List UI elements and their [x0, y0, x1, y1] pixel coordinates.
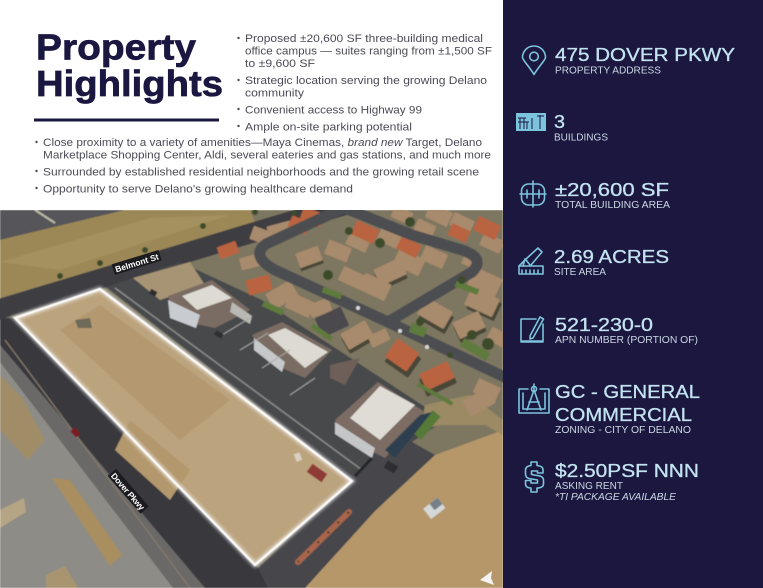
highlights list: right column: office campus — suites ranging from ±1,500 SF [245, 46, 492, 58]
highlights list: full-width rows: Marketplace Shopping Center, Aldi, several eateries and gas stations, and much more [43, 150, 491, 162]
stat: buildings [516, 112, 608, 144]
north arrow [480, 571, 494, 585]
title rule [34, 118, 219, 122]
street label: Belmont St: Belmont St [114, 252, 160, 274]
houses [239, 203, 512, 417]
lawns and trees [262, 281, 490, 440]
icon: dollar sign [526, 462, 544, 492]
highlights list: full-width rows: Surrounded by established residential neighborhoods and the growing retail scene [43, 166, 479, 178]
icon: compass and blueprint [519, 384, 549, 413]
parking lot top left [0, 210, 125, 240]
stat: address: PROPERTY ADDRESS [555, 66, 661, 76]
stat: asking rent [526, 461, 699, 503]
title [36, 26, 223, 104]
highlights list: right column: Ample on-site parking potential [245, 122, 412, 134]
highlights list: right column: Proposed ±20,600 SF three-building medical [245, 33, 483, 45]
red shed [307, 464, 327, 482]
lower right field [305, 430, 503, 588]
stat: site area: SITE AREA [554, 267, 606, 278]
parcel outline [15, 289, 352, 565]
stat: APN [521, 315, 698, 346]
residential ground [0, 210, 503, 588]
stat: buildings: 3 [554, 112, 565, 132]
highlights list: right column: community [245, 88, 305, 100]
stat: buildings: BUILDINGS [554, 133, 608, 144]
development strip [106, 262, 445, 480]
icon: pencil on notepad [521, 317, 544, 342]
stat: zoning: ZONING - CITY OF DELANO [555, 425, 691, 436]
stat: zoning: GC - GENERAL [555, 382, 700, 402]
stat: asking rent: ASKING RENT [555, 481, 623, 492]
stat: asking rent: *TI PACKAGE AVAILABLE [555, 492, 676, 503]
stat: address: 475 DOVER PKWY [555, 45, 735, 65]
stat: zoning: COMMERCIAL [555, 405, 692, 425]
frontage lane [0, 340, 205, 588]
lower left site [0, 355, 173, 588]
title: Highlights [36, 63, 223, 104]
stat: APN: APN NUMBER (PORTION OF) [555, 335, 698, 346]
dry field top left [0, 210, 255, 298]
title: Property [36, 26, 196, 68]
stat: address [522, 45, 735, 76]
stat: building area: ±20,600 SF [555, 180, 669, 200]
highlights list: full-width rows: Close proximity to a variety of amenities—Maya Cinemas, brand new Target, Delano [43, 137, 482, 149]
street label: Dover Pkwy: Dover Pkwy [109, 471, 147, 512]
highlights list: full-width rows [35, 137, 491, 196]
highlights list: right column: Strategic location serving the growing Delano [245, 75, 487, 87]
parking stripes and cars [222, 318, 315, 395]
stat: asking rent: $2.50PSF NNN [555, 461, 699, 481]
stat: site area: 2.69 ACRES [554, 247, 669, 267]
trailer [423, 498, 445, 519]
stat: site area [519, 247, 669, 278]
stat: building area: TOTAL BUILDING AREA [555, 200, 670, 211]
parked cars on residential streets [356, 306, 429, 349]
planted median [298, 512, 349, 562]
navy side panel [503, 0, 763, 588]
icon: location pin [522, 46, 546, 74]
red car [70, 427, 81, 438]
parcel land [15, 289, 352, 565]
Dover Pkwy road [0, 318, 280, 588]
dark solar roof house [315, 306, 349, 338]
stat: building area [520, 180, 670, 211]
sloped shadow on drive [355, 458, 372, 476]
Belmont St road [0, 205, 345, 312]
stat: APN: 521-230-0 [555, 315, 653, 335]
highlights list: full-width rows: Opportunity to serve Delano's growing healthcare demand [43, 184, 353, 196]
development buildings [168, 280, 250, 328]
stat: zoning [519, 382, 700, 436]
highlights list: right column [237, 33, 492, 134]
icon: buildings [516, 113, 546, 131]
rear parking and drive [258, 435, 435, 588]
house shadows [296, 249, 502, 397]
icon: crosshair [520, 181, 546, 207]
residential streets [260, 205, 515, 382]
white header background [0, 0, 503, 210]
highlights list: right column: to ±9,600 SF [245, 58, 315, 70]
aerial photo of the site [0, 203, 515, 588]
icon: ruler and pencil [519, 248, 543, 274]
highlights list: right column: Convenient access to Highway 99 [245, 104, 422, 116]
